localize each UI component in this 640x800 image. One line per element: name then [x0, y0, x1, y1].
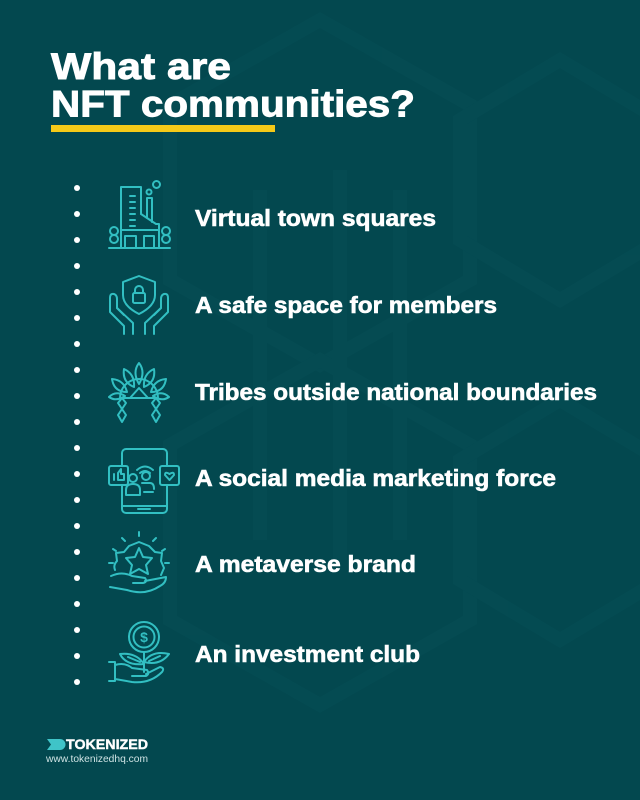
title: What are	[51, 46, 231, 87]
list item text: A social media marketing force	[195, 465, 556, 491]
icon: shield and hands	[110, 276, 168, 334]
list item text: Virtual town squares	[195, 205, 436, 231]
title	[51, 46, 415, 124]
title: NFT communities?	[51, 84, 415, 124]
logo: Tokenized	[45, 737, 148, 765]
icon: feather headdress	[109, 363, 169, 422]
list item text: A safe space for members	[195, 292, 497, 318]
logo: Tokenized: TOKENIZED	[66, 737, 148, 752]
logo: Tokenized: www.tokenizedhq.com	[45, 753, 148, 765]
icon: smartphone social media	[109, 449, 179, 513]
list item text: Tribes outside national boundaries	[195, 379, 597, 405]
list item text	[195, 205, 597, 667]
icon: city buildings	[109, 181, 170, 248]
list item text: An investment club	[195, 641, 420, 667]
dotted timeline	[74, 185, 80, 685]
icon: money plant in hand: $	[140, 629, 148, 645]
title underline	[51, 125, 275, 132]
icon: money plant in hand	[109, 622, 169, 682]
icon: star in hand	[109, 532, 169, 592]
list item text: A metaverse brand	[195, 551, 416, 577]
